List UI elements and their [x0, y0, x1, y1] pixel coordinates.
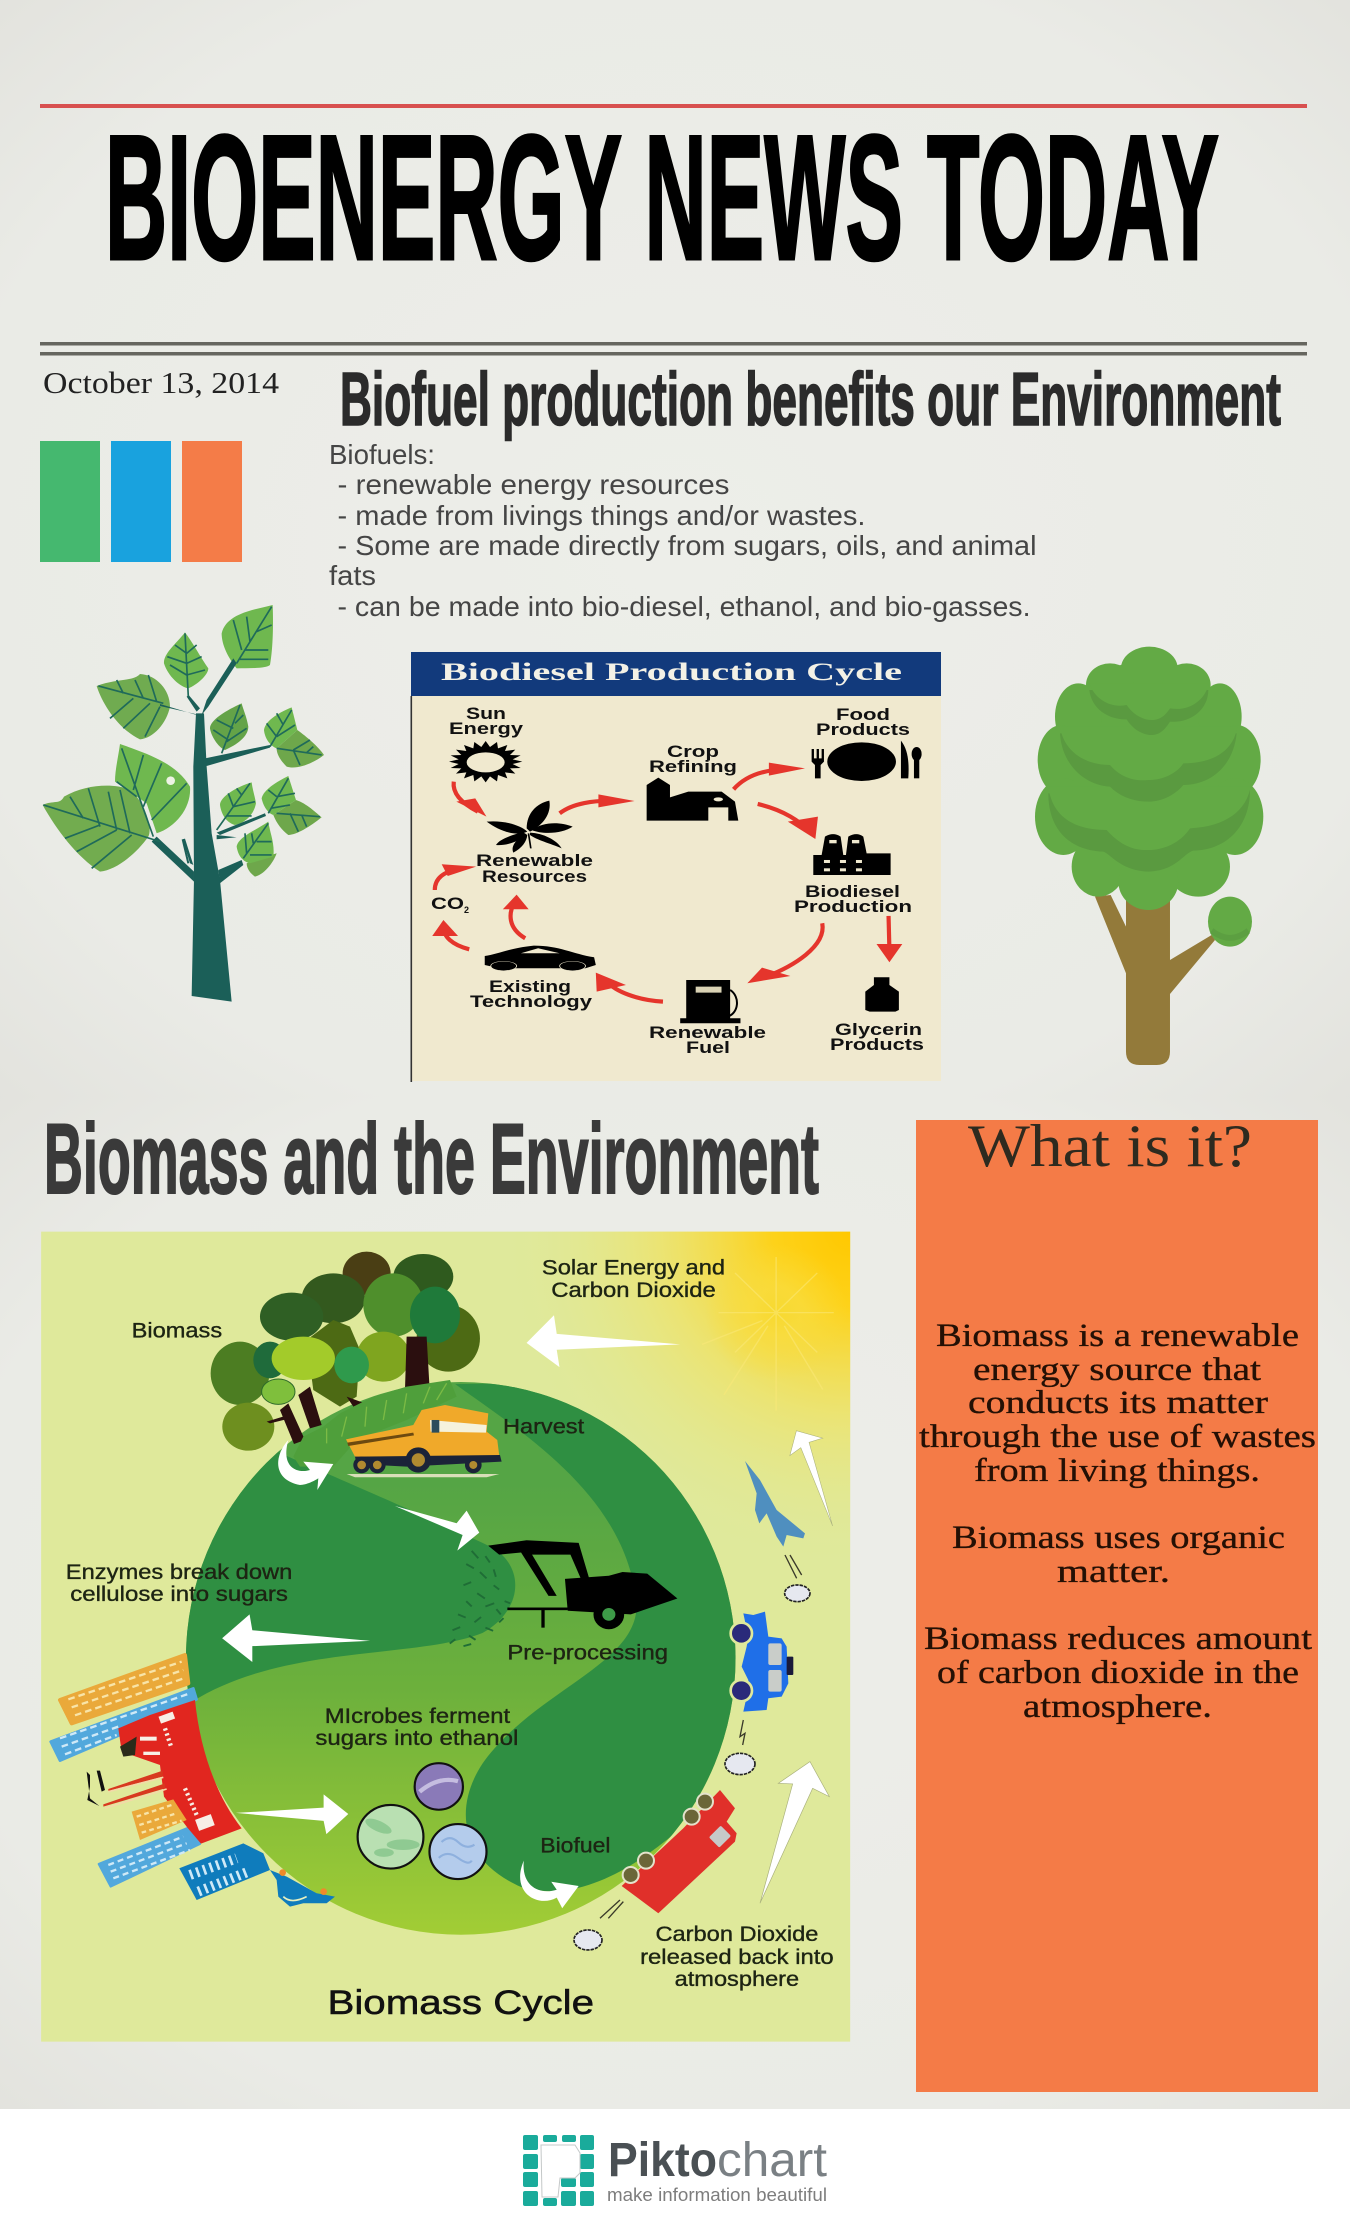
diagram labels: cellulose into sugars [70, 1582, 288, 1606]
white atmosphere arrow [760, 1762, 829, 1903]
icon: car [485, 946, 596, 971]
diagram labels: Carbon Dioxide [551, 1277, 716, 1302]
cycle labels: Refining [649, 757, 737, 776]
icon: plate and cutlery [812, 741, 922, 781]
diagram labels: atmosphere [675, 1966, 799, 1991]
date: October 13, 2014 [43, 365, 280, 400]
cycle labels: Biodiesel [805, 882, 900, 901]
icon: glycerin bottle [865, 977, 899, 1012]
diagram labels: sugars into ethanol [315, 1726, 518, 1750]
cycle labels: Products [830, 1035, 924, 1054]
cycle labels: Crop [667, 742, 719, 761]
icon: fuel pump [680, 980, 740, 1023]
logo wordmark light: chart [717, 2134, 827, 2187]
panel body text: from living things. [974, 1453, 1260, 1489]
biofuels text: Biofuels: [329, 439, 435, 470]
panel body text: of carbon dioxide in the [937, 1655, 1299, 1691]
panel body text: conducts its matter [968, 1385, 1268, 1421]
panel header text: Biodiesel Production Cycle [441, 659, 902, 686]
paper background bottom [0, 1097, 1350, 2109]
exhaust clouds [574, 1585, 810, 1950]
cycle labels: Sun [466, 704, 506, 723]
cycle labels: Existing [489, 977, 571, 996]
panel background [411, 652, 941, 1081]
cycle labels: Renewable [649, 1023, 766, 1042]
icon: left leafy tree [43, 605, 324, 1002]
diagram labels: Solar Energy and [542, 1255, 725, 1279]
cycle labels: Renewable [476, 851, 593, 870]
blue car [731, 1612, 793, 1712]
panel body text: Biomass uses organic [952, 1520, 1285, 1556]
biofuels text: - renewable energy resources [338, 469, 730, 500]
panel body text: Biomass reduces amount [924, 1621, 1312, 1657]
icon: barn [647, 778, 738, 821]
vehicles, plane and atmosphere arrow [574, 1461, 829, 1950]
diagram labels [66, 1255, 834, 2022]
double rule [40, 342, 1307, 356]
biofuels text: - can be made into bio-diesel, ethanol, and bio-gasses. [338, 591, 1030, 622]
exhaust streaks [600, 1555, 802, 1918]
cycle labels: 2 [464, 905, 469, 915]
panel body text: energy source that [973, 1352, 1261, 1388]
panel header [411, 652, 941, 696]
biomass trees and harvest truck [211, 1252, 502, 1551]
cycle labels: Technology [470, 992, 593, 1011]
logo tagline: make information beautiful [607, 2185, 827, 2205]
icon: sun [449, 741, 522, 782]
biofuels text: - Some are made directly from sugars, oils, and animal [338, 530, 1036, 561]
panel background [916, 1120, 1318, 2092]
pre-processing machine [488, 1540, 677, 1629]
footer band [0, 2109, 1350, 2233]
cycle labels: Fuel [686, 1038, 730, 1057]
cycle labels: Glycerin [835, 1020, 922, 1039]
diagram labels: Pre-processing [507, 1640, 668, 1664]
cycle labels [431, 704, 924, 1057]
diagram labels: Biomass [132, 1318, 222, 1342]
red rule [40, 104, 1307, 108]
panel body text: Biomass is a renewable [936, 1318, 1299, 1354]
machine, microbes, arrows, labels [66, 1255, 834, 2022]
cycle labels: Products [816, 720, 910, 739]
panel: biodiesel production cycle [410, 652, 941, 1082]
panel left edge [410, 696, 412, 1082]
logo mark [523, 2135, 594, 2206]
cycle labels: Energy [449, 719, 524, 738]
diagram labels: Enzymes break down [66, 1559, 292, 1584]
panel body text: through the use of wastes [919, 1419, 1316, 1455]
diagram background and globe [41, 1232, 850, 2042]
panel: what is it [916, 1113, 1318, 2092]
colour bars [40, 441, 242, 562]
biofuels text: - made from livings things and/or wastes. [338, 500, 866, 531]
icon: plant [487, 801, 573, 853]
cycle labels: CO [431, 894, 464, 913]
cycle labels: Food [836, 705, 890, 724]
paper background top [0, 0, 1350, 1097]
white arrows [222, 1315, 833, 1908]
chart: biomass cycle diagram [41, 1232, 850, 2042]
diagram labels: MIcrobes ferment [325, 1703, 510, 1728]
plane [745, 1461, 805, 1547]
biofuels text: fats [329, 560, 376, 591]
cycle labels: Production [794, 897, 912, 916]
panel body text: matter. [1057, 1554, 1170, 1590]
diagram labels: Carbon Dioxide [655, 1921, 818, 1946]
panel body text: atmosphere. [1023, 1689, 1212, 1725]
diagram labels: Harvest [503, 1414, 584, 1438]
footer logo [523, 2134, 827, 2206]
cycle labels: Resources [482, 867, 587, 886]
icon: factory [813, 834, 891, 875]
cycle arrows [432, 763, 902, 1002]
panel body text [919, 1318, 1316, 1725]
biomass chips [450, 1551, 510, 1646]
red truck [622, 1790, 737, 1913]
icon: right round tree [1035, 647, 1263, 1065]
diagram labels: Biomass Cycle [327, 1985, 594, 2022]
factory and fuel pump [51, 1655, 335, 1907]
diagram labels: Biofuel [540, 1833, 610, 1858]
logo wordmark: Pikto [608, 2134, 717, 2187]
biofuels text [329, 439, 1036, 622]
panel heading: What is it? [968, 1113, 1252, 1179]
diagram labels: released back into [640, 1944, 834, 1969]
microbes [358, 1763, 487, 1879]
